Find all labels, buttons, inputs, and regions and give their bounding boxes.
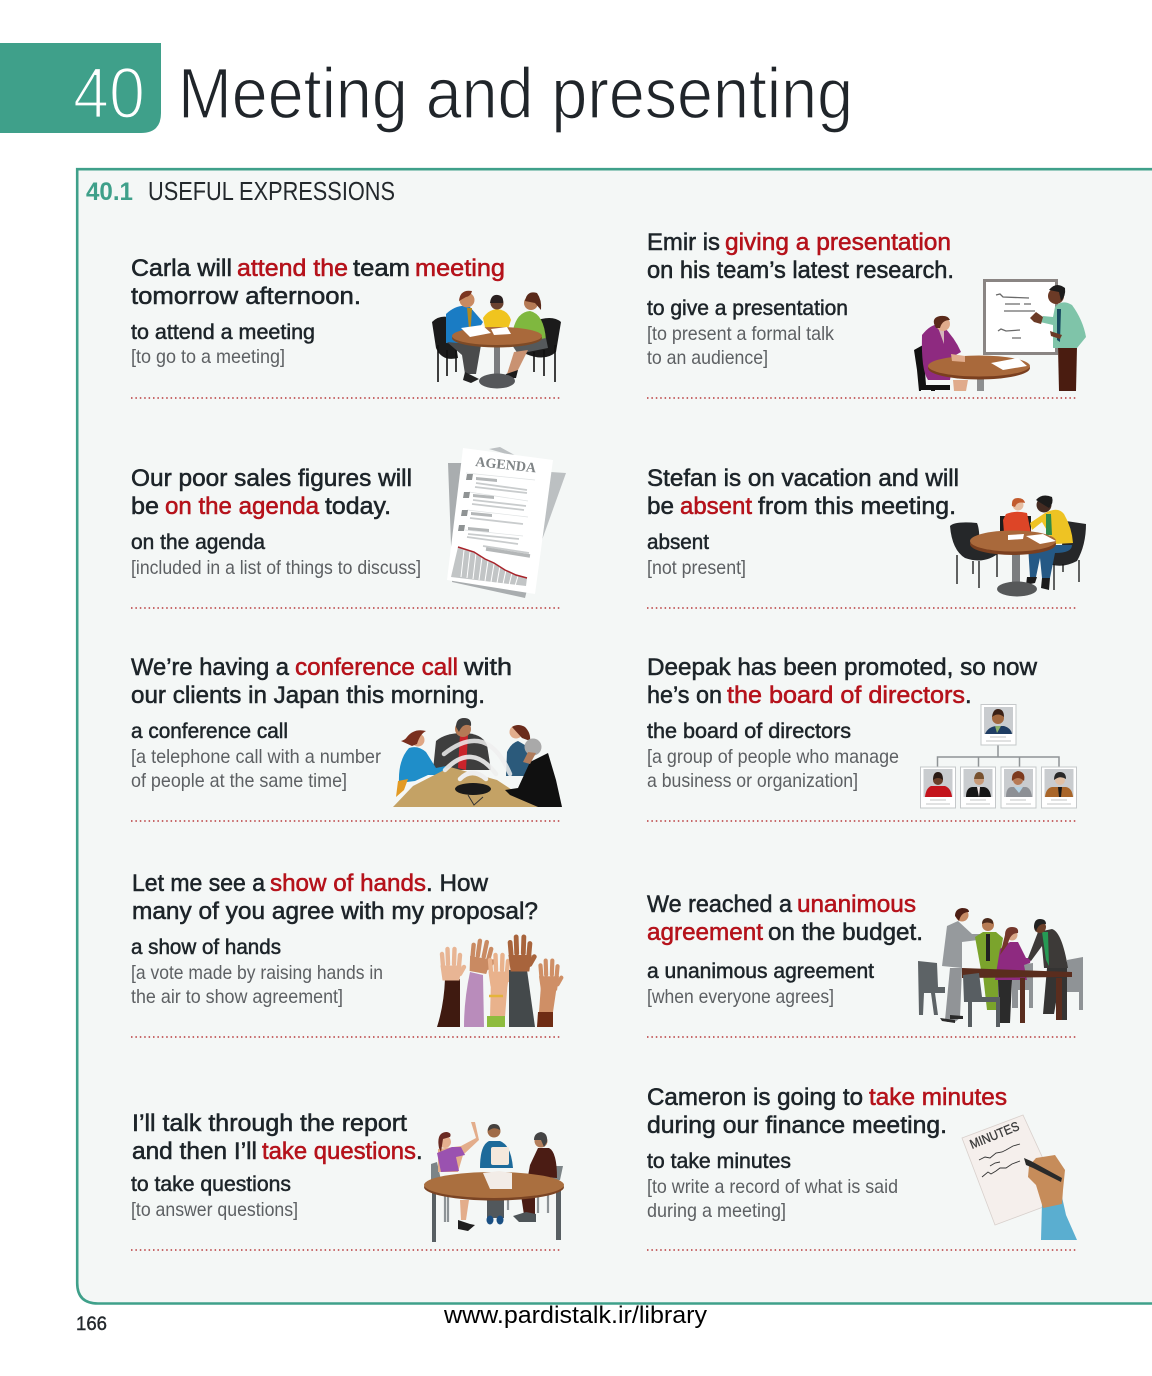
illustration: hand writing minutes: MINUTES xyxy=(968,1118,1022,1152)
example sentence: be xyxy=(647,493,674,520)
example sentence: Let me see a xyxy=(132,870,266,897)
example sentence: . xyxy=(965,682,972,709)
example sentence: today. xyxy=(325,493,391,520)
definition xyxy=(647,1176,898,1222)
illustration: three people at a round table xyxy=(432,291,561,388)
definition: the air to show agreement] xyxy=(131,986,343,1008)
illustration: man presenting at a board to a seated woman xyxy=(914,280,1086,391)
definition: [to go to a meeting] xyxy=(131,346,285,368)
example sentence: many of you agree with my proposal? xyxy=(132,898,538,925)
expression: the board of directors xyxy=(647,654,1076,808)
example sentence: he’s on xyxy=(647,682,722,709)
example sentence: Stefan is on vacation and will xyxy=(647,465,959,492)
example sentence: tomorrow afternoon. xyxy=(131,283,361,310)
definition: [when everyone agrees] xyxy=(647,986,834,1008)
example sentence: Carla will xyxy=(131,255,232,282)
definition: during a meeting] xyxy=(647,1200,786,1222)
term: to give a presentation xyxy=(647,297,848,320)
example sentence: on the agenda xyxy=(165,493,320,520)
expression: to take minutes xyxy=(647,1084,1077,1240)
definition: [to present a formal talk xyxy=(647,323,834,345)
example sentence: take minutes xyxy=(869,1084,1007,1111)
section heading: 40.1 xyxy=(86,178,133,206)
term: a show of hands xyxy=(131,936,281,959)
example sentence xyxy=(132,1110,423,1165)
example sentence xyxy=(131,654,512,709)
page number: 166 xyxy=(76,1314,107,1335)
example sentence: team xyxy=(353,255,410,282)
example sentence: be xyxy=(131,493,159,520)
definition xyxy=(131,962,383,1008)
example sentence xyxy=(131,465,412,520)
illustration: hand writing minutes xyxy=(962,1115,1077,1240)
expression: a unanimous agreement xyxy=(647,891,1083,1027)
example sentence: with xyxy=(463,654,512,681)
example sentence: agreement xyxy=(647,919,763,946)
example sentence: We reached a xyxy=(647,891,793,918)
example sentence: and then I’ll xyxy=(132,1138,257,1165)
example sentence: our clients in Japan this morning. xyxy=(131,682,485,709)
example sentence: on his team’s latest research. xyxy=(647,257,954,284)
title: Meeting and presenting xyxy=(178,55,853,134)
expression: on the agenda xyxy=(131,447,566,598)
example sentence: meeting xyxy=(415,255,505,282)
example sentence xyxy=(647,229,954,284)
term: to attend a meeting xyxy=(131,321,315,344)
illustration: three people at a table, one raising a hand xyxy=(424,1122,564,1242)
website credit: www.pardistalk.ir/library xyxy=(443,1302,707,1329)
term: a conference call xyxy=(131,720,288,743)
example sentence xyxy=(647,465,959,520)
term: to take questions xyxy=(131,1173,291,1196)
example sentence: from this meeting. xyxy=(758,493,956,520)
definition: [included in a list of things to discuss] xyxy=(131,557,421,579)
illustration: conference call around a table xyxy=(393,718,562,807)
term: absent xyxy=(647,531,709,554)
example sentence: Our poor sales figures will xyxy=(131,465,412,492)
example sentence: giving a presentation xyxy=(725,229,951,256)
definition: to an audience] xyxy=(647,347,768,369)
term: a unanimous agreement xyxy=(647,960,874,983)
chapter number tab xyxy=(0,43,161,134)
example sentence: during our finance meeting. xyxy=(647,1112,947,1139)
illustration: organization chart of directors xyxy=(920,704,1076,808)
definition: [to answer questions] xyxy=(131,1199,298,1221)
definition: [a group of people who manage xyxy=(647,746,899,768)
term: on the agenda xyxy=(131,531,265,554)
expression: to give a presentation xyxy=(647,229,1086,391)
expression: to take questions xyxy=(131,1110,564,1242)
expression: absent xyxy=(647,465,1086,596)
example sentence xyxy=(647,1084,1007,1139)
illustration: man and woman at a table next to an empty chair xyxy=(950,496,1086,596)
example sentence: absent xyxy=(680,493,752,520)
example sentence: We’re having a xyxy=(131,654,290,681)
example sentence: . xyxy=(416,1138,423,1165)
example sentence: the board of directors xyxy=(727,682,965,709)
expression: to attend a meeting xyxy=(131,255,561,388)
example sentence: conference call xyxy=(295,654,458,681)
example sentence: on the budget. xyxy=(768,919,923,946)
term: the board of directors xyxy=(647,720,851,743)
example sentence: take questions xyxy=(262,1138,416,1165)
example sentence: show of hands xyxy=(270,870,426,897)
example sentence: . How xyxy=(426,870,489,897)
term: to take minutes xyxy=(647,1150,791,1173)
definition: [a telephone call with a number xyxy=(131,746,381,768)
example sentence: Cameron is going to xyxy=(647,1084,863,1111)
example sentence xyxy=(131,255,505,310)
example sentence: unanimous xyxy=(797,891,916,918)
section heading: USEFUL EXPRESSIONS xyxy=(148,176,395,206)
expression: a conference call xyxy=(131,654,562,807)
example sentence: Emir is xyxy=(647,229,720,256)
illustration: agenda document with chart: AGENDA xyxy=(475,455,538,476)
illustration: agenda document with chart xyxy=(447,447,566,598)
example sentence: Deepak has been promoted, so now xyxy=(647,654,1038,681)
definition: [to write a record of what is said xyxy=(647,1176,898,1198)
definition: a business or organization] xyxy=(647,770,858,792)
panel: useful expressions xyxy=(77,169,1152,1304)
section heading xyxy=(86,176,395,206)
illustration: four colleagues shaking hands over a table xyxy=(918,908,1083,1027)
expression: a show of hands xyxy=(131,870,561,1027)
chapter number tab: 40 xyxy=(73,54,145,134)
example sentence xyxy=(647,891,923,946)
example sentence xyxy=(647,654,1038,709)
illustration: five raised hands xyxy=(437,937,561,1027)
definition xyxy=(647,746,899,792)
definition: of people at the same time] xyxy=(131,770,347,792)
definition xyxy=(647,323,834,369)
definition xyxy=(131,746,381,792)
example sentence: I’ll talk through the report xyxy=(132,1110,407,1137)
definition: [a vote made by raising hands in xyxy=(131,962,383,984)
example sentence xyxy=(132,870,538,925)
definition: [not present] xyxy=(647,557,746,579)
example sentence: attend the xyxy=(237,255,348,282)
